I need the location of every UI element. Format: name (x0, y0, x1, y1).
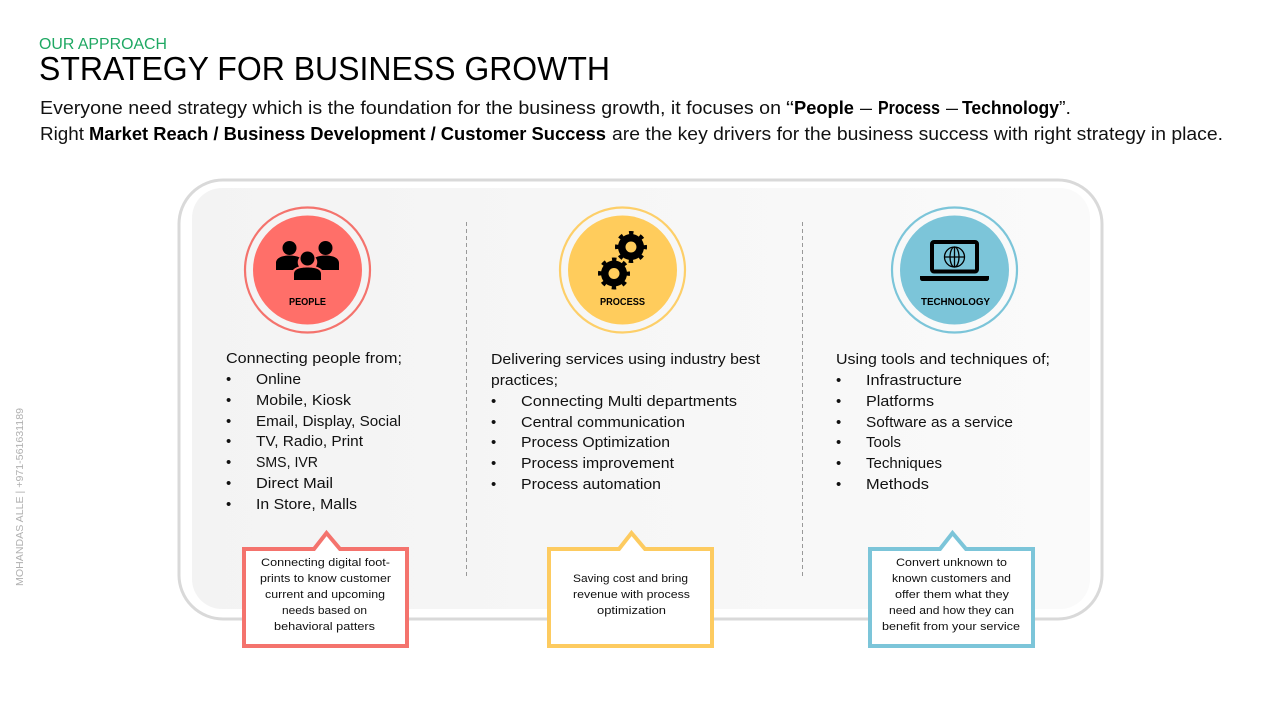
text block: technology list: Techniques (866, 455, 942, 472)
text block: people list: TV, Radio, Print (256, 433, 364, 450)
badge: process (560, 208, 685, 332)
intro paragraph: Everyone need strategy which is the foundation for the business growth, it focuses on (40, 98, 781, 118)
text block: people list: In Store, Malls (256, 496, 357, 513)
text block: people list: Connecting people from; (226, 350, 402, 367)
text block: technology list: • (836, 434, 841, 451)
text block: people list: • (226, 475, 231, 492)
intro paragraph: – (946, 98, 958, 118)
label: process: PROCESS (600, 297, 645, 308)
text block: people list: • (226, 454, 231, 471)
callout: process: Saving cost and bring (573, 573, 688, 585)
text block: process list: Delivering services using industry best (491, 351, 761, 368)
text block: technology list: Methods (866, 476, 929, 493)
eyebrow: our approach: OUR APPROACH (39, 36, 167, 53)
callout: technology: benefit from your service (882, 621, 1020, 633)
icon: laptop with globe (920, 242, 989, 281)
text block: process list: Process Optimization (521, 434, 670, 451)
text block: people list: • (226, 371, 231, 388)
intro paragraph: ”. (1059, 98, 1071, 118)
intro paragraph: People (794, 98, 854, 118)
text block: people list (226, 350, 402, 513)
callout: people: current and upcoming (265, 589, 385, 601)
panel: outer rounded frame (179, 180, 1102, 619)
text block: technology list: • (836, 372, 841, 389)
text block: technology list: Software as a service (866, 414, 1013, 431)
callout: technology: offer them what they (895, 589, 1010, 601)
text block: process list: • (491, 455, 496, 472)
vertical credit: MOHANDAS ALLE | +971-561631189 (15, 408, 26, 586)
text block: people list: Online (256, 371, 301, 388)
label: technology: TECHNOLOGY (921, 297, 990, 308)
text block: people list: • (226, 496, 231, 513)
icon: gears (600, 234, 644, 287)
text block: people list: • (226, 392, 231, 409)
intro paragraph: “ (786, 98, 794, 118)
intro paragraph: Technology (962, 98, 1059, 118)
callout: people: Connecting digital foot- (261, 557, 390, 569)
text block: technology list: • (836, 476, 841, 493)
callout: process: optimization (597, 605, 666, 617)
text block: process list: • (491, 476, 496, 493)
callout: process (549, 533, 712, 646)
intro paragraph: – (860, 98, 872, 118)
intro paragraph: are the key drivers for the business success with right strategy in place. (612, 124, 1223, 144)
text block: technology list: Platforms (866, 393, 934, 410)
text block: people list: Email, Display, Social (256, 413, 401, 430)
text block: process list: Connecting Multi departments (521, 393, 737, 410)
badge: people (245, 208, 370, 332)
text block: process list: Central communication (521, 414, 685, 431)
callout: process: revenue with process (573, 589, 691, 601)
text block: technology list: • (836, 414, 841, 431)
text block: technology list: Infrastructure (866, 372, 962, 389)
text block: process list (491, 351, 761, 493)
callout: technology (870, 533, 1033, 646)
text block: process list: • (491, 414, 496, 431)
intro paragraph: Right (40, 124, 84, 144)
callout: people: behavioral patters (274, 621, 376, 633)
text block: technology list: Using tools and techniques of; (836, 351, 1050, 368)
callout: people (244, 533, 407, 646)
text block: process list: Process automation (521, 476, 661, 493)
callout: people: prints to know customer (260, 573, 391, 585)
text block: process list: • (491, 393, 496, 410)
text block: technology list: • (836, 393, 841, 410)
text block: technology list: • (836, 455, 841, 472)
text block: people list: SMS, IVR (256, 454, 318, 471)
text block: people list: Direct Mail (256, 475, 333, 492)
text block: process list: • (491, 434, 496, 451)
text block: process list: Process improvement (521, 455, 675, 472)
text block: people list: • (226, 413, 231, 430)
intro paragraph: Process (878, 98, 940, 118)
text block: process list: practices; (491, 372, 558, 389)
callout: technology: Convert unknown to (896, 557, 1007, 569)
callout: technology: known customers and (892, 573, 1011, 585)
text block: technology list (836, 351, 1050, 493)
icon: people (276, 241, 339, 280)
badge: technology (892, 208, 1017, 332)
label: people: PEOPLE (289, 297, 326, 308)
panel: inner background (192, 188, 1090, 609)
callout: people: needs based on (282, 605, 367, 617)
text block: technology list: Tools (866, 434, 901, 451)
text block: people list: Mobile, Kiosk (256, 392, 352, 409)
title: STRATEGY FOR BUSINESS GROWTH (39, 50, 610, 87)
callout: technology: need and how they can (889, 605, 1014, 617)
text block: people list: • (226, 433, 231, 450)
intro paragraph (40, 98, 1223, 144)
intro paragraph: Market Reach / Business Development / Customer Success (89, 124, 606, 144)
